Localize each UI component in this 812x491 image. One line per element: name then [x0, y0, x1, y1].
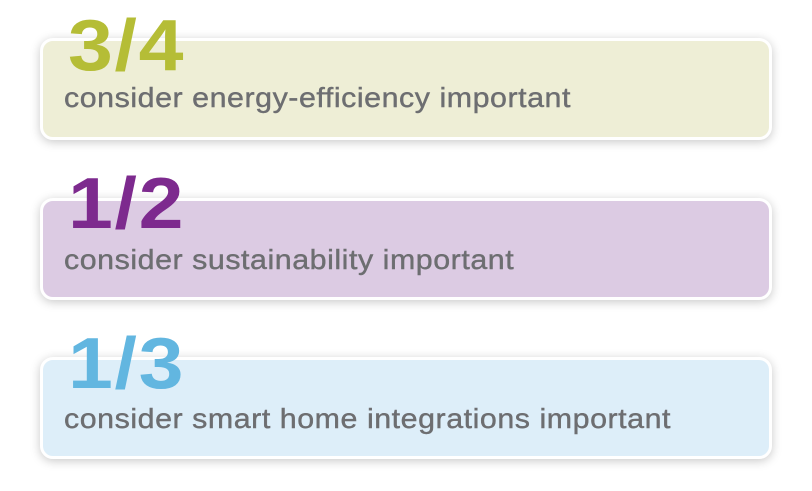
- panel: energy-efficiency: [40, 38, 772, 140]
- text: smart home: consider smart home integrations important: [64, 403, 671, 434]
- text: energy-efficiency: consider energy-efficiency important: [64, 82, 571, 113]
- stat: 3/4: 3/4: [68, 6, 185, 86]
- stat: 1/2: 1/2: [68, 164, 185, 244]
- text: sustainability: consider sustainability important: [64, 244, 514, 275]
- panel: smart home: [40, 357, 772, 459]
- stat: 1/3: 1/3: [68, 324, 185, 404]
- panel: sustainability: [40, 198, 772, 300]
